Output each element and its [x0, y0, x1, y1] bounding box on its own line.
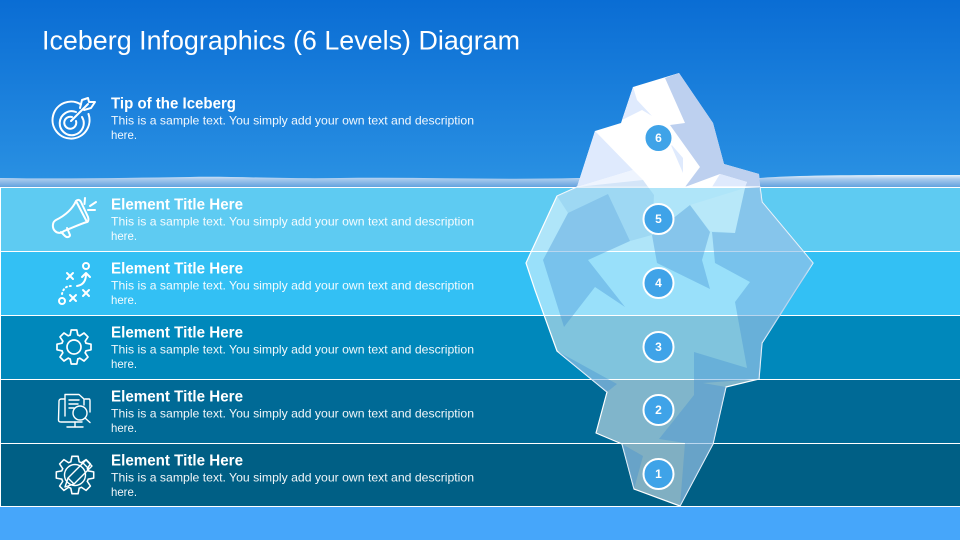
- icon: gear with pencil: [56, 456, 94, 494]
- level markers: [644, 124, 674, 489]
- level bands: [0, 188, 960, 506]
- marker 4: [644, 268, 674, 298]
- marker 5: 5: [655, 212, 662, 226]
- marker 1: [644, 459, 674, 489]
- text: level 1: [111, 452, 474, 499]
- text: level 5: This is a sample text. You simply add your own text and description: [111, 214, 474, 228]
- text: level 3: [111, 324, 474, 371]
- marker 3: [644, 332, 674, 362]
- text: level 1: This is a sample text. You simply add your own text and description: [111, 470, 474, 484]
- text: tip of the iceberg: here.: [111, 128, 137, 142]
- marker 1: 1: [655, 467, 662, 481]
- text: tip of the iceberg: This is a sample text. You simply add your own text and description: [111, 114, 474, 128]
- text: level 2: Element Title Here: [111, 388, 243, 406]
- marker 6: [644, 124, 672, 152]
- text: level 4: here.: [111, 293, 137, 307]
- marker 5: [644, 204, 674, 234]
- bottom water strip: [0, 506, 960, 540]
- text: level 5: [111, 196, 474, 243]
- marker 3: 3: [655, 340, 662, 354]
- waterline waves: [0, 175, 960, 188]
- text: tip of the iceberg: [111, 96, 474, 142]
- text: level 3: This is a sample text. You simply add your own text and description: [111, 342, 474, 356]
- text: level 4: This is a sample text. You simply add your own text and description: [111, 278, 474, 292]
- iceberg body below water: [526, 180, 813, 506]
- text: level 3: Element Title Here: [111, 324, 243, 342]
- text: level 2: here.: [111, 421, 137, 435]
- marker 2: [644, 395, 674, 425]
- iceberg tip above water: [577, 73, 760, 187]
- text: level 4: [111, 260, 474, 307]
- text: tip of the iceberg: Tip of the Iceberg: [111, 96, 236, 112]
- icon: strategy play: [59, 263, 90, 304]
- text: level 2: This is a sample text. You simply add your own text and description: [111, 406, 474, 420]
- icon: megaphone: [53, 198, 96, 237]
- text: level 5: here.: [111, 229, 137, 243]
- marker 6: 6: [655, 131, 662, 145]
- icon: document search on monitor: [58, 394, 90, 427]
- text: level 5: Element Title Here: [111, 196, 243, 214]
- text: level 4: Element Title Here: [111, 260, 243, 278]
- title: Iceberg Infographics (6 Levels) Diagram: [42, 26, 520, 56]
- background: sky: [0, 0, 960, 190]
- text: level 2: [111, 388, 474, 435]
- text: level 1: here.: [111, 485, 137, 499]
- icon: target with arrow: [53, 98, 95, 139]
- text: level 1: Element Title Here: [111, 452, 243, 470]
- text: level 3: here.: [111, 357, 137, 371]
- icon: gear: [57, 330, 91, 364]
- marker 2: 2: [655, 403, 662, 417]
- marker 4: 4: [655, 276, 662, 290]
- iceberg: [526, 73, 813, 506]
